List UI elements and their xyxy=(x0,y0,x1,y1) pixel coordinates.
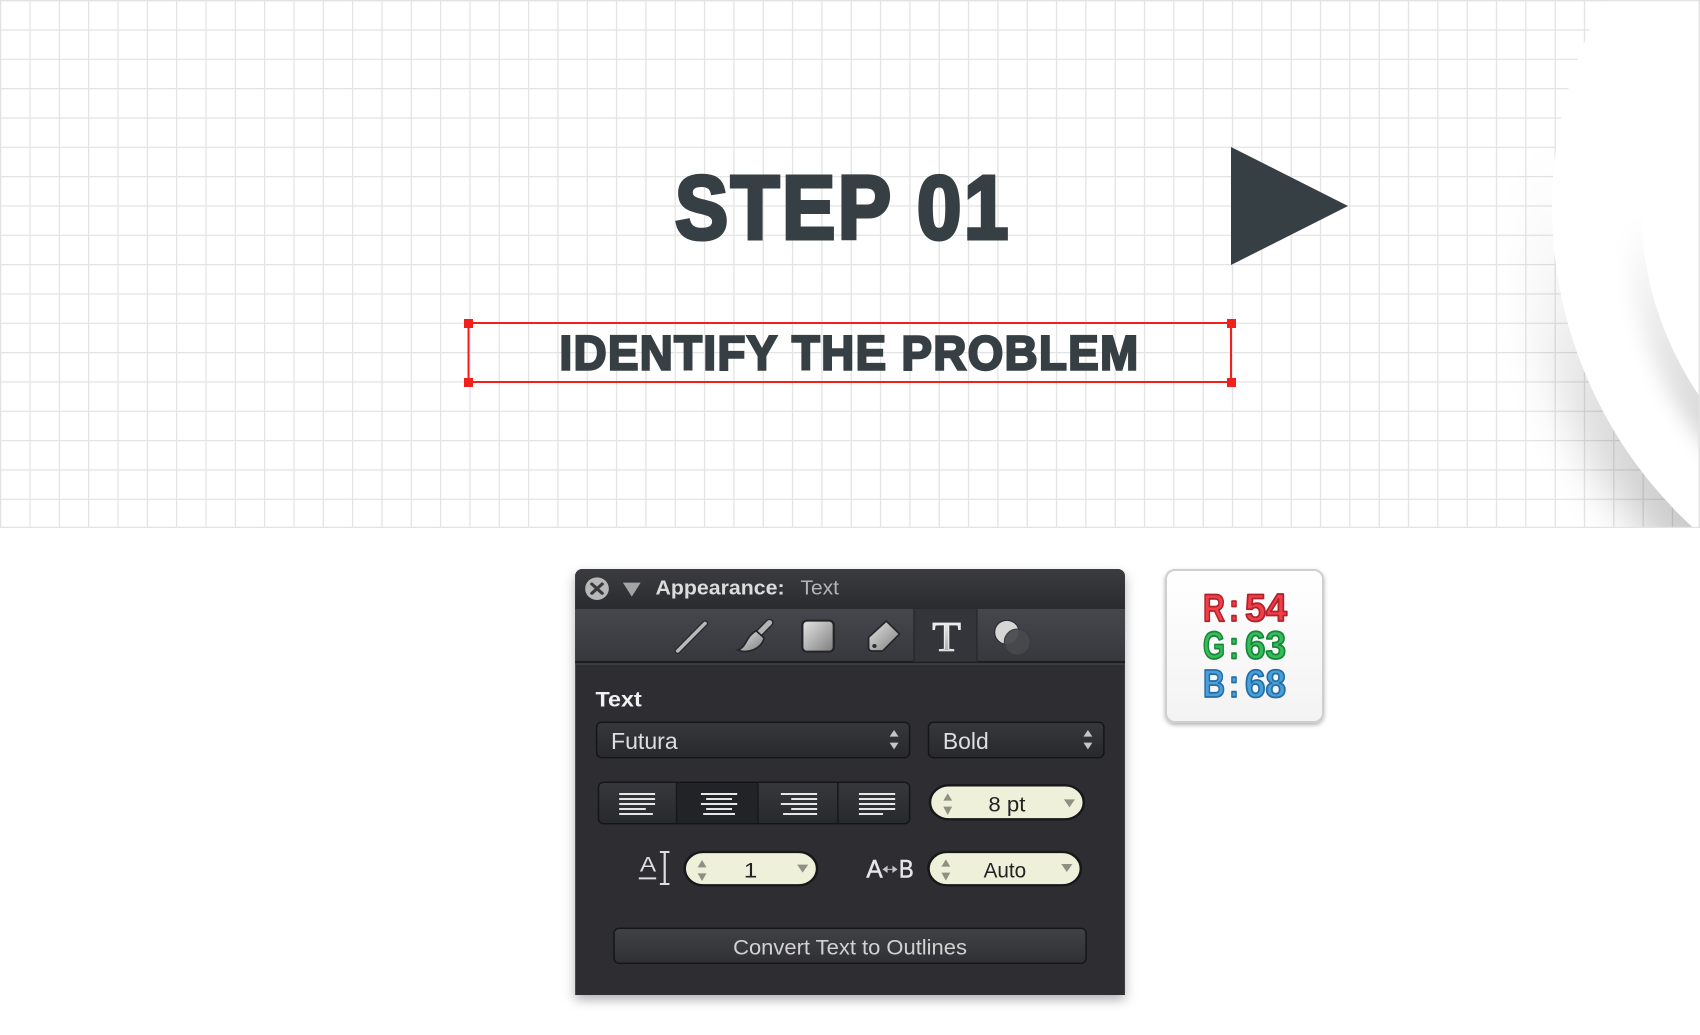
grid background xyxy=(0,0,1700,528)
red value: : xyxy=(1229,587,1239,630)
card: RGB values xyxy=(1166,570,1323,722)
header value: Text xyxy=(800,577,839,599)
stepper: font size: 8 pt xyxy=(988,792,1026,816)
icon: disclosure triangle xyxy=(623,583,641,597)
icon: tag xyxy=(869,621,900,651)
title: STEP 01: STEP 01 xyxy=(675,159,1011,259)
panel header xyxy=(575,569,1125,609)
icon: line height: A xyxy=(640,853,656,876)
toolbar xyxy=(575,609,1125,665)
stepper: character spacing xyxy=(928,852,1081,885)
icon: character spacing: B xyxy=(899,855,914,883)
panel: appearance text xyxy=(575,569,1125,995)
dropdown: font weight xyxy=(928,722,1104,758)
blue value: B xyxy=(1203,663,1225,706)
icon: fill square xyxy=(802,621,834,652)
red value: 54 xyxy=(1245,587,1287,630)
blue value: 68 xyxy=(1245,663,1286,706)
green value xyxy=(1203,624,1286,668)
header label: Appearance: xyxy=(655,577,785,599)
stepper: line height xyxy=(685,852,817,885)
icon: align center xyxy=(701,794,737,814)
icon: overlapping circles xyxy=(995,620,1030,655)
green value: 63 xyxy=(1245,624,1286,668)
icon: justify xyxy=(859,794,895,814)
icon: text tool: T xyxy=(932,613,961,660)
green value: : xyxy=(1229,624,1239,668)
stepper: character spacing: Auto xyxy=(984,858,1026,882)
dropdown: font family: Futura xyxy=(611,729,678,755)
stepper: font size xyxy=(930,785,1084,819)
section heading: Text: Text xyxy=(596,687,642,711)
subtitle: identify the problem: IDENTIFY THE PROBLEM xyxy=(560,328,1140,380)
stepper: line height: 1 xyxy=(744,857,757,882)
red value xyxy=(1203,587,1287,630)
icon: align right xyxy=(781,794,817,814)
dropdown: font weight: Bold xyxy=(943,729,989,755)
icon: character spacing: A xyxy=(866,855,883,883)
icon: close button xyxy=(585,577,609,600)
icon: align left xyxy=(619,794,655,814)
selection box with subtitle xyxy=(464,319,1236,387)
green value: G xyxy=(1203,624,1225,668)
icon: brush tool xyxy=(738,623,769,651)
icon: line tool xyxy=(678,623,705,651)
decorative circles with shadow xyxy=(1539,1,1698,527)
dropdown: font family xyxy=(597,722,910,758)
segmented control: alignment xyxy=(598,782,910,824)
icon: line height xyxy=(639,852,670,884)
blue value: : xyxy=(1229,663,1239,706)
arrow: play triangle xyxy=(1231,147,1348,265)
button: convert text to outlines: Convert Text to Outlines xyxy=(733,934,967,959)
blue value xyxy=(1203,663,1286,706)
button: convert text to outlines xyxy=(614,928,1086,963)
red value: R xyxy=(1203,587,1225,630)
icon: character spacing xyxy=(866,855,914,883)
